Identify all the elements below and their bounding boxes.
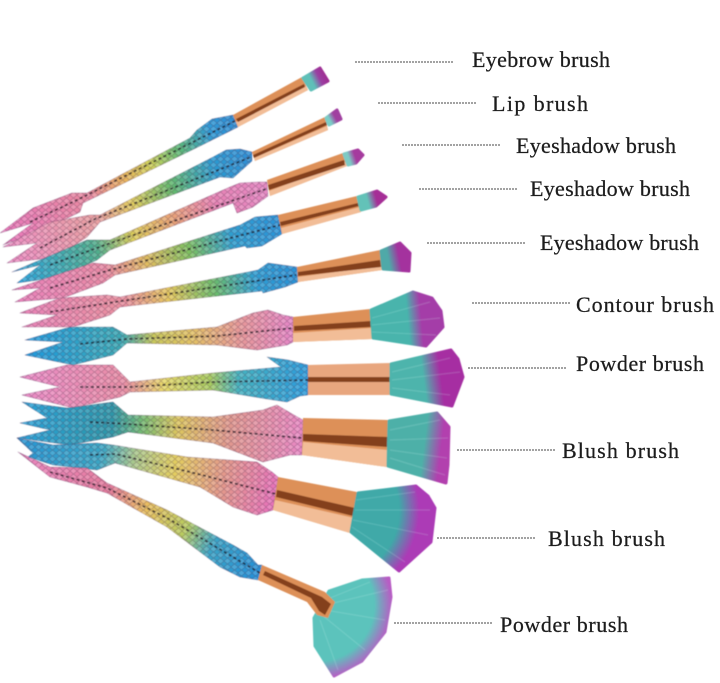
label text: Eyeshadow brush <box>516 133 676 158</box>
label text: Powder brush <box>576 351 704 376</box>
bristles <box>391 350 463 406</box>
bristles <box>314 578 391 676</box>
leader line <box>402 144 500 146</box>
ferrule <box>302 418 388 467</box>
handle and tail <box>0 115 238 245</box>
ferrule <box>308 363 390 395</box>
bristles <box>358 191 386 210</box>
label text: Eyeshadow brush <box>530 176 690 201</box>
leader line <box>437 537 536 539</box>
brush 6: contour <box>25 292 443 365</box>
leader line <box>472 302 570 304</box>
handle and tail <box>17 402 303 462</box>
handle and tail <box>17 438 278 515</box>
brush 9: blush <box>17 438 435 571</box>
ferrule <box>278 196 361 234</box>
handle and tail <box>12 182 268 283</box>
leader line <box>355 61 453 63</box>
leader line <box>419 188 518 190</box>
brush set illustration <box>0 68 463 676</box>
ferrule <box>233 77 308 127</box>
brush 2: lip <box>3 110 341 263</box>
label text: Eyebrow brush <box>472 47 610 72</box>
ferrule <box>273 477 357 533</box>
brush 5: eyeshadow <box>20 243 410 327</box>
leader line <box>468 367 567 369</box>
bristles <box>344 150 363 165</box>
ferrule <box>258 565 335 618</box>
ferrule <box>252 117 328 161</box>
leader line <box>427 242 526 244</box>
handle and tail <box>25 310 293 365</box>
handle and tail <box>20 263 298 327</box>
ferrule <box>293 309 372 342</box>
ferrule <box>267 153 347 196</box>
brush 3: eyeshadow <box>12 150 363 283</box>
label text: Eyeshadow brush <box>540 230 699 255</box>
brush 10: powder fan <box>18 452 391 676</box>
brush 4: eyeshadow <box>12 191 386 302</box>
label text: Contour brush <box>576 292 714 317</box>
bristles <box>351 486 435 571</box>
bristles <box>326 110 341 125</box>
brush 8: blush <box>17 402 449 483</box>
leader line <box>378 102 477 104</box>
bristles <box>381 243 410 271</box>
brush 1: eyebrow <box>0 68 328 245</box>
handle and tail <box>20 357 308 408</box>
label text: Powder brush <box>500 612 628 637</box>
label text: Blush brush <box>562 438 679 463</box>
leader line <box>457 449 555 451</box>
ferrule <box>297 250 382 282</box>
label text: Lip brush <box>492 91 588 116</box>
handle and tail <box>3 149 252 263</box>
leader line <box>394 622 492 624</box>
bristles <box>371 292 443 346</box>
handle and tail <box>18 452 262 580</box>
label text: Blush brush <box>548 526 665 551</box>
bristles <box>388 413 449 483</box>
bristles <box>303 68 328 90</box>
handle and tail <box>12 215 282 302</box>
brush 7: powder <box>20 350 463 408</box>
